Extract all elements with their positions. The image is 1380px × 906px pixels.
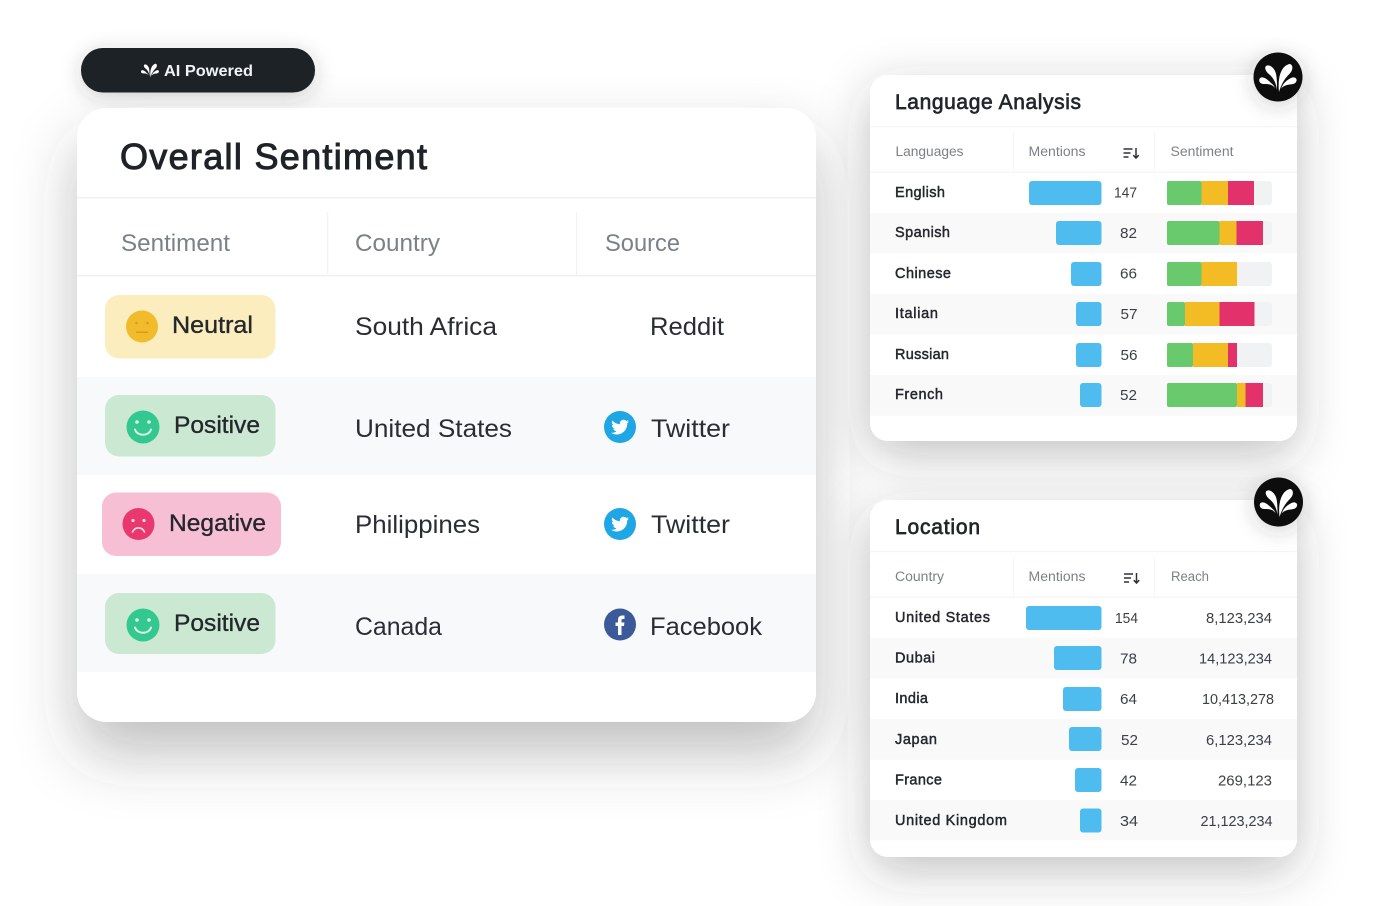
- row stripes: [870, 126, 1297, 172]
- tag: positive: [105, 593, 276, 654]
- row: Italian: [895, 302, 1272, 326]
- row: France: 269,123: [1218, 774, 1272, 790]
- row: India: 10,413,278: [1202, 692, 1274, 708]
- row: United Kingdom: 21,123,234: [1200, 814, 1272, 830]
- row: English: 147: [1114, 186, 1137, 202]
- row: French: 52: [1120, 388, 1137, 404]
- row: English: [895, 181, 1272, 205]
- row: Russian: 56: [1120, 348, 1138, 364]
- row: Dubai: 78: [1120, 652, 1137, 668]
- table header: [121, 230, 680, 257]
- row: United Kingdom: 34: [1120, 814, 1138, 830]
- row: France: France: [895, 772, 942, 788]
- table header: Sentiment: [121, 230, 230, 257]
- row: Negative, Philippines, Twitter: Philippines: [355, 511, 480, 539]
- table header: Mentions: [1028, 569, 1086, 584]
- row: Negative, Philippines, Twitter: [102, 492, 730, 556]
- table header: Country: [355, 230, 440, 257]
- row: Spanish: 82: [1120, 226, 1137, 242]
- tag: negative: Negative: [169, 510, 266, 537]
- row: Neutral, South Africa, Reddit: [105, 295, 724, 358]
- table header: [895, 569, 1209, 584]
- icon: sprout badge top: [1254, 52, 1302, 102]
- row: Positive, United States, Twitter: Twitter: [651, 415, 730, 443]
- row: Positive, Canada, Facebook: Canada: [355, 613, 442, 641]
- row: United States: [895, 606, 1272, 630]
- row: Russian: [895, 343, 1272, 367]
- badge: AI Powered: [81, 48, 315, 92]
- row: Dubai: Dubai: [895, 650, 935, 666]
- table header: [896, 144, 1234, 159]
- heading: Overall Sentiment: Overall Sentiment: [120, 136, 427, 177]
- heading: Location: Location: [895, 516, 980, 539]
- icon: facebook: [604, 608, 636, 640]
- tag: neutral: [105, 295, 276, 358]
- table header: Mentions: [1028, 144, 1086, 159]
- row stripes: [870, 551, 1297, 598]
- panel: overall sentiment: [77, 108, 816, 722]
- row: French: French: [895, 387, 943, 403]
- row: Spanish: Spanish: [895, 225, 950, 241]
- row: French: [895, 383, 1272, 407]
- row: France: 42: [1120, 774, 1137, 790]
- icon: sort: [1124, 148, 1139, 158]
- row: English: English: [895, 185, 945, 201]
- table header: Sentiment: [1170, 144, 1234, 159]
- row: United States: 8,123,234: [1206, 611, 1272, 627]
- row: United States: 154: [1115, 611, 1138, 627]
- row: Japan: [895, 727, 1272, 751]
- row: France: [895, 768, 1272, 792]
- row: Japan: 6,123,234: [1206, 733, 1272, 749]
- tag: neutral: Neutral: [172, 312, 253, 339]
- icon: sprout badge bottom: [1254, 478, 1303, 526]
- table header: Source: [605, 230, 680, 257]
- row: Positive, United States, Twitter: [105, 395, 730, 456]
- row: Negative, Philippines, Twitter: Twitter: [651, 511, 730, 539]
- row: Neutral, South Africa, Reddit: South Africa: [355, 313, 497, 341]
- row: Russian: Russian: [895, 347, 949, 363]
- row: Italian: Italian: [895, 306, 938, 322]
- badge: AI Powered: AI Powered: [164, 63, 253, 80]
- row: Chinese: Chinese: [895, 266, 951, 282]
- row: India: [895, 687, 1274, 711]
- row: Chinese: [895, 262, 1272, 286]
- panel: language analysis: [870, 75, 1297, 441]
- row: Spanish: [895, 221, 1272, 245]
- heading: Language Analysis: Language Analysis: [895, 91, 1081, 114]
- icon: sort: [1124, 573, 1139, 583]
- tag: positive: [105, 395, 276, 456]
- table header: Reach: [1171, 569, 1209, 584]
- row: Positive, Canada, Facebook: [105, 593, 763, 654]
- row: United States: United States: [895, 610, 990, 626]
- table header: Languages: [896, 144, 964, 159]
- row: Positive, United States, Twitter: United States: [355, 415, 512, 443]
- row: Japan: Japan: [895, 732, 937, 748]
- tag: positive: Positive: [174, 412, 260, 439]
- row: India: 64: [1120, 692, 1137, 708]
- icon: twitter: [604, 508, 636, 540]
- panel: location: [870, 500, 1297, 857]
- row: United Kingdom: United Kingdom: [895, 813, 1007, 829]
- row: Positive, Canada, Facebook: Facebook: [650, 613, 763, 641]
- row stripes: [77, 197, 816, 276]
- row: Japan: 52: [1121, 733, 1138, 749]
- tag: positive: Positive: [174, 610, 260, 637]
- icon: AI sprout: [141, 64, 159, 77]
- icon: twitter: [604, 411, 636, 443]
- table header: Country: [895, 569, 944, 584]
- row: Italian: 57: [1120, 307, 1138, 323]
- row: Dubai: 14,123,234: [1199, 652, 1272, 668]
- tag: negative: [102, 492, 281, 556]
- row: Neutral, South Africa, Reddit: Reddit: [650, 313, 724, 341]
- row: Chinese: 66: [1120, 266, 1137, 282]
- row: United Kingdom: [895, 808, 1272, 832]
- row: India: India: [895, 691, 929, 707]
- row: Dubai: [895, 646, 1272, 670]
